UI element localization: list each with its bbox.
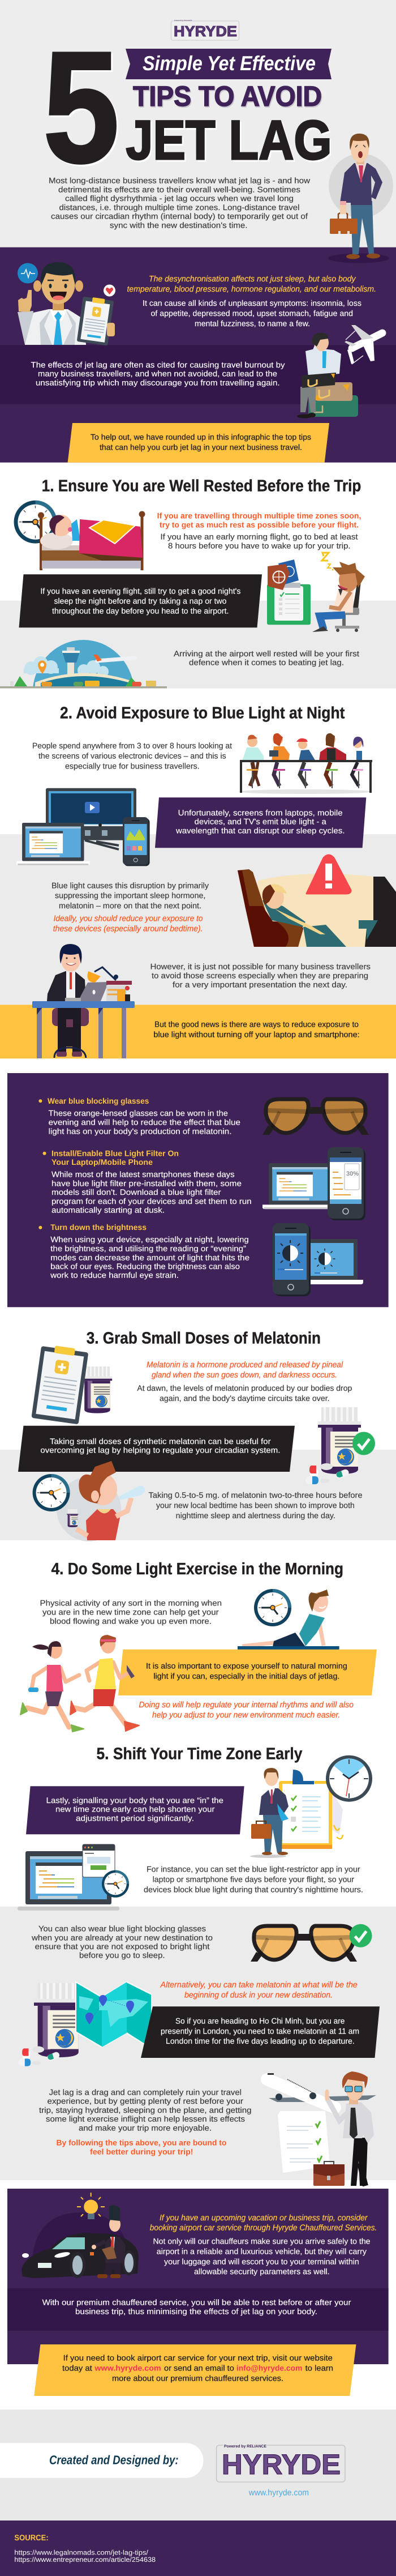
callout: book airport car service: to learn (305, 2363, 333, 2372)
icon: people at bar with devices (239, 733, 372, 794)
callout: synthetic melatonin (18, 1426, 295, 1472)
text: screen hours: especially true for business travellers. (65, 762, 200, 771)
icon: tired traveller on luggage (297, 333, 358, 418)
text: morning activity: you are in the new time zone can help get your (42, 1607, 219, 1616)
icon: two runners (20, 1635, 139, 1732)
title (43, 19, 333, 198)
icon: laptop with popup and clock (18, 1844, 129, 1910)
background: intro area (0, 0, 396, 247)
text: wear glasses at destination (31, 1924, 213, 1960)
callout: blue light wavelength: wavelength that can disrupt our sleep cycles. (175, 826, 345, 835)
list item: blue light filter: Your Laptop/Mobile Phone (51, 1157, 153, 1167)
icon: laptop and phone with filter (262, 1147, 365, 1220)
heading: tip 4: 4. Do Some Light Exercise in the Morning (51, 1560, 343, 1578)
text: well rested advice: try to get as much rest as possible before your flight. (160, 520, 359, 529)
text: melatonin dose: Taking 0.5-to-5 mg. of melatonin two-to-three hours before (148, 1490, 363, 1500)
list item: blue blocking glasses: evening and will help to reduce the effect that blue (49, 1118, 240, 1127)
title: 5 (43, 19, 119, 196)
text: screen hours: People spend anywhere from 3 to over 8 hours looking at (32, 741, 232, 750)
icon: clock and man drinking water (33, 1461, 145, 1541)
icon: sleeping child in bed (38, 511, 145, 570)
text: conclusion: By following the tips above, you are bound to (57, 2138, 226, 2147)
icon: brightness on phone and laptop (273, 1223, 363, 1296)
callout: blue light wavelength: Unfortunately, screens from laptops, mobile (178, 808, 343, 817)
text: melatonin at dusk: Alternatively, you can take melatonin at what will be the (160, 1981, 358, 1990)
callout: evening flight (19, 574, 262, 627)
icon: person in armchair with warning sign (238, 855, 396, 947)
text: premium service (42, 2298, 351, 2316)
callout: book airport car service (34, 2344, 356, 2396)
icon: melatonin bottle with check and pills (305, 1407, 375, 1484)
text: not possible to avoid: to avoid those screens especially when they are preparing (152, 971, 368, 980)
text: desynchronisation: of appetite, depressed mood, upset stomach, fatigue and (150, 309, 353, 318)
title: TIPS TO AVOID (134, 82, 322, 113)
text: melatonin definition (137, 1361, 352, 1403)
icon: laptop base (18, 1907, 119, 1911)
intro text: detrimental its effects are to their overall well-being. Sometimes (58, 185, 300, 194)
list item: blue blocking glasses: These orange-lensed glasses can be worn in the (49, 1109, 228, 1118)
label: created and designed by: Created and Designed by: (49, 2453, 179, 2467)
panel: yellow good news band: But the good news is there are ways to reduce exposure to (154, 1019, 359, 1028)
text: desynchronisation: It can cause all kinds of unpleasant symptoms: insomnia, loss (143, 298, 361, 307)
icon: plane, checklist and traveller (267, 2071, 376, 2186)
background: tip 1 lower (0, 601, 396, 689)
icon: man working at desk (32, 944, 135, 1058)
panel: sources: https://www.entrepreneur.com/article/254638 (14, 2556, 156, 2564)
text: travel burnout: many business travellers, and when not avoided, can lead to the (38, 369, 277, 378)
callout: synthetic melatonin: Taking small doses of synthetic melatonin can be useful for (50, 1437, 271, 1446)
callout: shift body clock: adjustment period significantly. (76, 1814, 194, 1823)
panel: ways to reduce blue light (7, 1073, 389, 1307)
text: blue-light restrictor app: laptop or smartphone five days before your flight, so your (153, 1874, 354, 1883)
text: not possible to avoid: for a very important presentation the next day. (173, 980, 347, 989)
logo: Hyryde footer: HYRYDE (222, 2449, 341, 2480)
intro text: called flight dysrhythmia - jet lag occurs when we travel long (65, 194, 294, 203)
text: desynchronisation: mental fuzziness, to name a few. (195, 319, 310, 328)
list item: blue blocking glasses: Wear blue blocking glasses (48, 1096, 149, 1105)
text: well rested advice (157, 511, 361, 550)
text: conclusion: experience, but by getting plenty of rest before your (48, 2096, 243, 2105)
text: conclusion (39, 2087, 252, 2156)
text: travel burnout: The effects of jet lag are often as cited for causing travel burnout by (31, 360, 285, 369)
callout: shift body clock: Lastly, signalling your body that you are “in” the (46, 1796, 223, 1805)
panel: sources: SOURCE: (14, 2533, 49, 2542)
callout: yellow banner (68, 423, 329, 463)
icon: person stretching on mat (238, 1590, 339, 1651)
panel: sources (0, 2521, 396, 2576)
text: chauffeur offer (150, 2214, 377, 2276)
logo: Hyryde footer: www.hyryde.com (248, 2488, 309, 2498)
icon: chauffeur with car and idea bulb (21, 2193, 139, 2278)
text: chauffeur offer: Not only will our chauffeurs make sure you arrive safely to the (153, 2237, 371, 2246)
text: melatonin suppression: suppressing the important sleep hormone, (55, 891, 205, 900)
text: melatonin definition: again, and the body's daytime circuits take over. (160, 1394, 330, 1403)
list item: blue blocking glasses: light has on your body's production of melatonin. (49, 1127, 231, 1136)
title: JET LAG (127, 110, 333, 173)
text: melatonin dose (148, 1490, 363, 1520)
icon: clipboard, clock and businessman (250, 1755, 372, 1858)
label: created and designed by (0, 2443, 203, 2478)
intro text: Most long-distance business travellers know what jet lag is - and how (49, 176, 311, 185)
callout: yellow banner: that can help you curb jet lag in your next business travel. (100, 442, 302, 451)
list item: turn down brightness: the brightness, and utilising the reading or “evening” (50, 1244, 246, 1253)
callout: morning light: light if you can, especially in the initial days of jetlag. (153, 1672, 339, 1681)
text: melatonin dose: nighttime sleep and alertness during the day. (176, 1511, 335, 1520)
title: Simple Yet Effective (143, 52, 316, 75)
callout: book airport car service: or send an email to (164, 2363, 234, 2372)
text: melatonin suppression (51, 881, 209, 934)
list item: turn down brightness: back of our eyes. Reducing the brightness can also (50, 1262, 240, 1271)
text: premium service: With our premium chauffeured service, you will be able to rest before or after your (42, 2298, 351, 2307)
icon: monitor, laptop and phone (16, 788, 150, 866)
background: tip 3 lower (0, 1450, 396, 1540)
icon: orange glasses (262, 1099, 369, 1135)
callout: Ho Chi Minh example (141, 2006, 380, 2058)
text: conclusion: Jet lag is a drag and can completely ruin your travel (49, 2087, 242, 2096)
callout: Ho Chi Minh example: So if you are heading to Ho Chi Minh, but you are (175, 2016, 345, 2025)
list item: blue blocking glasses (38, 1096, 240, 1136)
icon: doctor with clipboard (18, 262, 115, 346)
text: melatonin suppression: Blue light causes this disruption by primarily (51, 881, 209, 890)
list item: blue light filter: Install/Enable Blue Light Filter On (51, 1148, 179, 1157)
icon: airport terminal (0, 640, 167, 689)
text: melatonin suppression: melatonin – more on that the next point. (59, 901, 201, 910)
callout: blue light wavelength (155, 797, 366, 848)
text: travel burnout: unsatisfying trip which may discourage you from travelling again. (36, 378, 280, 387)
callout: book airport car service: www.hyryde.com (94, 2363, 161, 2372)
list item: blue light filter (43, 1148, 252, 1215)
text: melatonin definition: gland when the sun goes down, and darkness occurs. (152, 1371, 337, 1380)
text: desynchronisation: temperature, blood pressure, hormone regulation, and our metabolism. (127, 285, 376, 294)
text: melatonin suppression: Ideally, you should reduce your exposure to (54, 915, 203, 924)
list item: turn down brightness: When using your device, especially at night, lowering (50, 1235, 249, 1244)
intro text: causes our circadian rhythm (internal body) to temporarily get out of (51, 212, 308, 221)
title: TIPS TO AVOID (133, 80, 322, 112)
heading: tip 5: 5. Shift Your Time Zone Early (96, 1745, 302, 1763)
intro text: sync with the new destination's time. (110, 220, 248, 229)
text: wear glasses at destination: when you are already at your new destination to (31, 1933, 213, 1942)
callout: morning light (118, 1650, 377, 1695)
text: wear glasses at destination: You can also wear blue light blocking glasses (38, 1924, 206, 1933)
icon: businessman with briefcase (328, 134, 393, 263)
callout: book airport car service: more about our premium chauffeured services. (112, 2373, 283, 2382)
text: rhythms (139, 1701, 354, 1720)
list item: blue light filter: automatically starting at dusk. (51, 1206, 165, 1215)
title: JET LAG (126, 109, 332, 171)
intro text: distances, i.e. through multiple time zones. Long-distance travel (59, 203, 300, 212)
callout: yellow banner: To help out, we have rounded up in this infographic the top tips (91, 433, 311, 442)
icon: clock behind bed (14, 501, 57, 544)
list item: turn down brightness: modes can decrease the amount of light that hits the (50, 1253, 249, 1262)
icon: airplane (345, 325, 382, 364)
text: not possible to avoid (150, 962, 371, 989)
text: airport defence: Arriving at the airport well rested will be your first (174, 649, 359, 658)
icon: bottle, pills and map (18, 1982, 152, 2066)
text: rhythms: Doing so will help regulate your internal rhythms and will also (139, 1701, 354, 1710)
text: desynchronisation (127, 275, 376, 328)
text: conclusion: trip, staying hydrated, sleeping on the plane, and getting (39, 2105, 252, 2114)
icon: passports and checklist (267, 559, 311, 625)
text: morning activity (40, 1599, 222, 1625)
heading: tip 2: 2. Avoid Exposure to Blue Light at Night (60, 704, 345, 722)
text: melatonin definition: Melatonin is a hormone produced and released by pineal (147, 1361, 343, 1370)
callout: book airport car service: info@hyryde.com (236, 2363, 302, 2372)
text: blue-light restrictor app (144, 1865, 363, 1894)
callout: evening flight: throughout the day before you head to the airport. (52, 606, 229, 616)
text: conclusion: and make your trip more enjoyable. (79, 2123, 212, 2132)
callout: book airport car service: If you need to book airport car service for your next trip, visit our website (63, 2353, 333, 2362)
text: airport defence (174, 649, 359, 667)
panel: yellow good news band: blue light without turning off your laptop and smartphone: (153, 1029, 360, 1039)
text: well rested advice: If you are travelling through multiple time zones soon, (157, 511, 361, 520)
heading: tip 3: 3. Grab Small Doses of Melatonin (87, 1329, 321, 1347)
text: travel burnout (31, 360, 285, 387)
icon: tired man in chair (312, 553, 365, 632)
text: chauffeur offer: allowable security parameters as well. (194, 2267, 330, 2276)
title: 5 (45, 21, 121, 198)
callout: shift body clock (26, 1786, 244, 1834)
text: premium service: business trip, thus minimising the effects of jet lag on your body. (75, 2307, 317, 2316)
text: blue-light restrictor app: devices block blue light during that country's nighttime hours. (144, 1885, 363, 1894)
text: morning activity: Physical activity of any sort in the morning when (40, 1599, 222, 1608)
text: blue-light restrictor app: For instance, you can set the blue light-restrictor app in your (147, 1865, 360, 1874)
text: chauffeur offer: booking airport car service through Hyryde Chauffeured Services. (150, 2224, 377, 2233)
panel: purple effects section (0, 247, 396, 463)
logo: Hyryde footer (217, 2443, 345, 2498)
text: chauffeur offer: If you have an upcoming vacation or business trip, consider (160, 2214, 368, 2223)
background: tip 5 lower (0, 1907, 396, 2180)
heading: tip 1: 1. Ensure You are Well Rested Before the Trip (42, 477, 361, 495)
text: chauffeur offer: airport in a reliable and luxurious vehicle, but they will carry (157, 2247, 367, 2256)
text: morning activity: blood flowing and wake you up even more. (50, 1616, 212, 1625)
callout: morning light: It is also important to expose yourself to natural morning (146, 1661, 347, 1671)
icon: glasses with check (251, 1924, 372, 1962)
text: screen hours (32, 741, 232, 771)
panel: sources: https://www.legalnomads.com/jet-lag-tips/ (14, 2549, 149, 2557)
list item: turn down brightness: Turn down the brightness (50, 1223, 147, 1232)
icon: bottle behind clipboard (82, 1366, 112, 1413)
text: desynchronisation: The desynchronisation affects not just sleep, but also body (149, 275, 356, 284)
text: wear glasses at destination: ensure that you are not exposed to bright light (35, 1942, 210, 1951)
text: chauffeur offer: your luggage and will escort you to your terminal within (164, 2257, 359, 2266)
icon: clock (254, 1589, 291, 1626)
text: airport defence: defence when it comes to beating jet lag. (189, 658, 344, 667)
text: not possible to avoid: However, it is just not possible for many business travellers (150, 962, 371, 971)
callout: Ho Chi Minh example: presently in London, you need to take melatonin at 11 am (161, 2026, 359, 2035)
panel: credits footer (0, 2410, 396, 2521)
list item: turn down brightness (38, 1223, 249, 1280)
text: melatonin at dusk: beginning of dusk in your new destination. (184, 1991, 333, 2000)
panel: Hyryde chauffeur services (7, 2189, 389, 2364)
text: melatonin at dusk (160, 1981, 358, 2000)
logo: Hyryde footer: Powered by RELIANCE (224, 2444, 266, 2449)
text: melatonin suppression: these devices (especially around bedtime). (53, 925, 203, 934)
list item: blue light filter: models still don't. Download a blue light filter (51, 1187, 221, 1197)
text: wear glasses at destination: before you go to sleep. (79, 1951, 165, 1960)
text: melatonin definition: At dawn, the levels of melatonin produced by our bodies drop (137, 1383, 352, 1392)
callout: evening flight: If you have an evening flight, still try to get a good night's (40, 586, 240, 595)
icon: medical clipboard (31, 1344, 89, 1424)
list item: turn down brightness: work to reduce harmful eye strain. (50, 1271, 179, 1280)
text: conclusion: some light exercise inflight can help lessen its effects (46, 2114, 245, 2124)
logo: Hyryde top: HYRYDE (174, 23, 237, 40)
intro text (49, 176, 311, 229)
text: melatonin dose: your new local bedtime has been shown to improve both (156, 1501, 355, 1510)
callout: evening flight: sleep the night before and try taking a nap or two (54, 596, 227, 605)
text: conclusion: feel better during your trip! (90, 2147, 193, 2156)
callout: synthetic melatonin: overcoming jet lag by helping to regulate your circadian system. (40, 1446, 281, 1455)
icon: laptop and phone with filter: 30% (346, 1170, 359, 1177)
list item: blue light filter: have blue light filter pre-installed with them, some (51, 1178, 242, 1187)
callout: book airport car service: today at (62, 2363, 92, 2372)
text: rhythms: help you adjust to your new environment much easier. (152, 1711, 340, 1720)
logo: Hyryde top: Powered by RELIANCE (174, 19, 192, 22)
panel: yellow good news band (0, 1005, 396, 1058)
callout: Ho Chi Minh example: London time for the five days leading up to departure. (166, 2036, 355, 2045)
background: tip 2 lower (0, 834, 396, 1005)
callout: shift body clock: new time zone early can help shorten your (55, 1805, 215, 1814)
callout: blue light wavelength: devices, and TV's emit blue light - a (195, 817, 326, 826)
list item: blue light filter: program for each of your devices and set them to run (51, 1197, 252, 1206)
text: well rested advice: 8 hours before you have to wake up for your trip. (168, 541, 351, 550)
list item: blue light filter: While most of the latest smartphones these days (51, 1170, 235, 1179)
text: well rested advice: If you have an early morning flight, go to bed at least (161, 532, 358, 541)
text: screen hours: the screens of various electronic devices – and this is (38, 751, 226, 760)
